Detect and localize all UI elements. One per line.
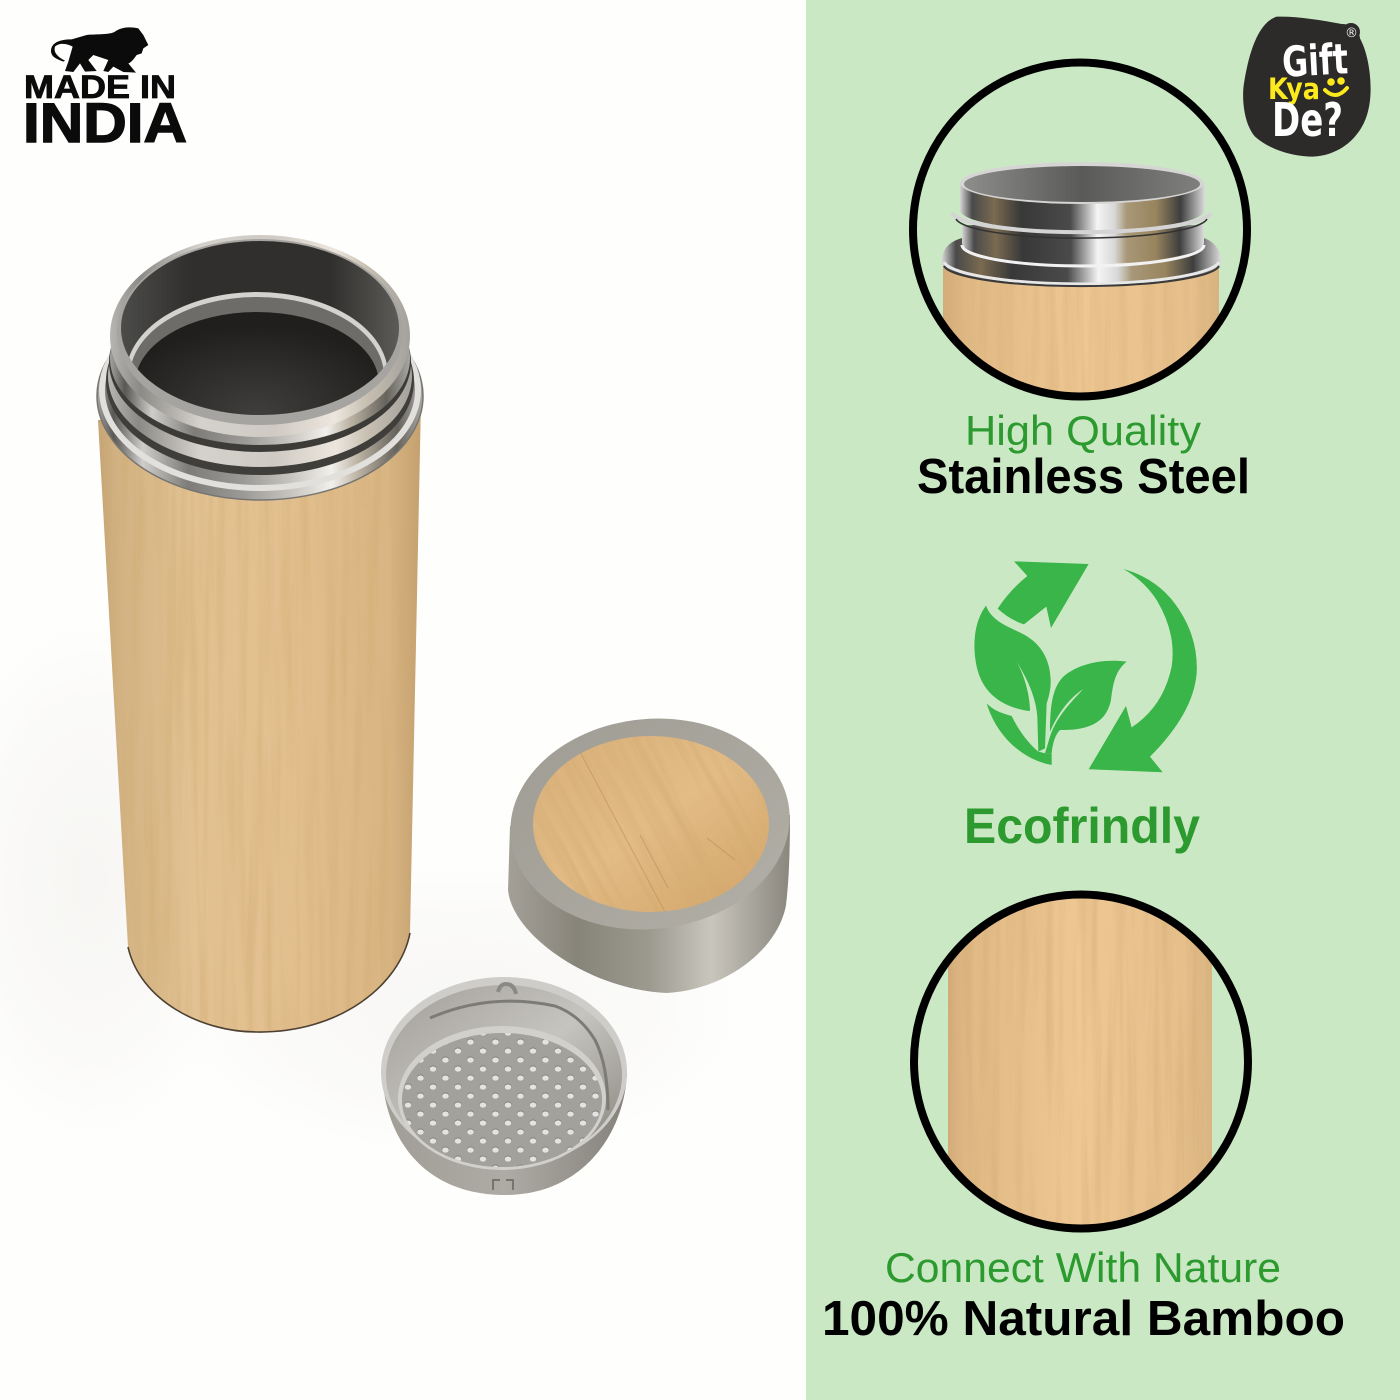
circle outline: [913, 62, 1247, 396]
top arrow: [998, 561, 1089, 628]
logo: Gift Kya De: [1243, 17, 1371, 157]
logo smiley: [1325, 79, 1347, 95]
circle image: flask neck: [942, 162, 1221, 402]
registered mark: [1342, 23, 1360, 41]
photo: tea strainer: [381, 977, 627, 1195]
flask body: [90, 400, 430, 1040]
large leaf: [974, 606, 1051, 752]
flask metal neck: [97, 235, 423, 500]
heading: Ecofrindly: Ecofrindly: [964, 798, 1200, 854]
text: INDIA: INDIA: [23, 91, 187, 154]
strainer inside: [386, 985, 622, 1165]
badge: Made in India: [23, 27, 187, 154]
photo: bamboo flask: [90, 235, 430, 1040]
right arrow: [1089, 569, 1197, 772]
flask opening: [121, 241, 399, 415]
text: MADE IN: MADE IN: [24, 69, 176, 105]
heading: Connect With Nature: Connect With Nature: [885, 1244, 1281, 1291]
heading: Stainless Steel: Stainless Steel: [917, 450, 1250, 504]
panel: green features background: [806, 0, 1400, 1400]
logo word De?: De?: [1272, 93, 1343, 147]
logo blob: [1243, 17, 1371, 157]
strainer wire handle: [430, 1001, 608, 1110]
circle outline: [914, 894, 1248, 1228]
circle image: bamboo surface: [948, 890, 1212, 1235]
lid top ring: [500, 705, 800, 943]
lower leaf: [987, 703, 1052, 765]
feature: stainless steel circle: [913, 62, 1247, 402]
heading: 100% Natural Bamboo: 100% Natural Bamboo: [822, 1292, 1345, 1346]
strainer rim: [381, 977, 627, 1167]
logo word Gift: Gift: [1281, 34, 1349, 87]
heading: High Quality: High Quality: [965, 407, 1201, 454]
icon: recycle leaf: [974, 561, 1197, 772]
strainer perforated disc: [400, 1030, 605, 1170]
feature: bamboo circle: [914, 890, 1248, 1235]
logo word Kya: Kya: [1268, 72, 1320, 106]
registered mark: ®: [1345, 26, 1358, 41]
photo: bamboo lid: [508, 718, 790, 993]
strainer side: [382, 1070, 627, 1195]
lid bamboo disc: [533, 736, 769, 912]
lid side: [508, 815, 790, 993]
icon: lion: [51, 27, 148, 73]
photo background: [0, 0, 806, 1400]
small leaf: [1045, 661, 1127, 753]
